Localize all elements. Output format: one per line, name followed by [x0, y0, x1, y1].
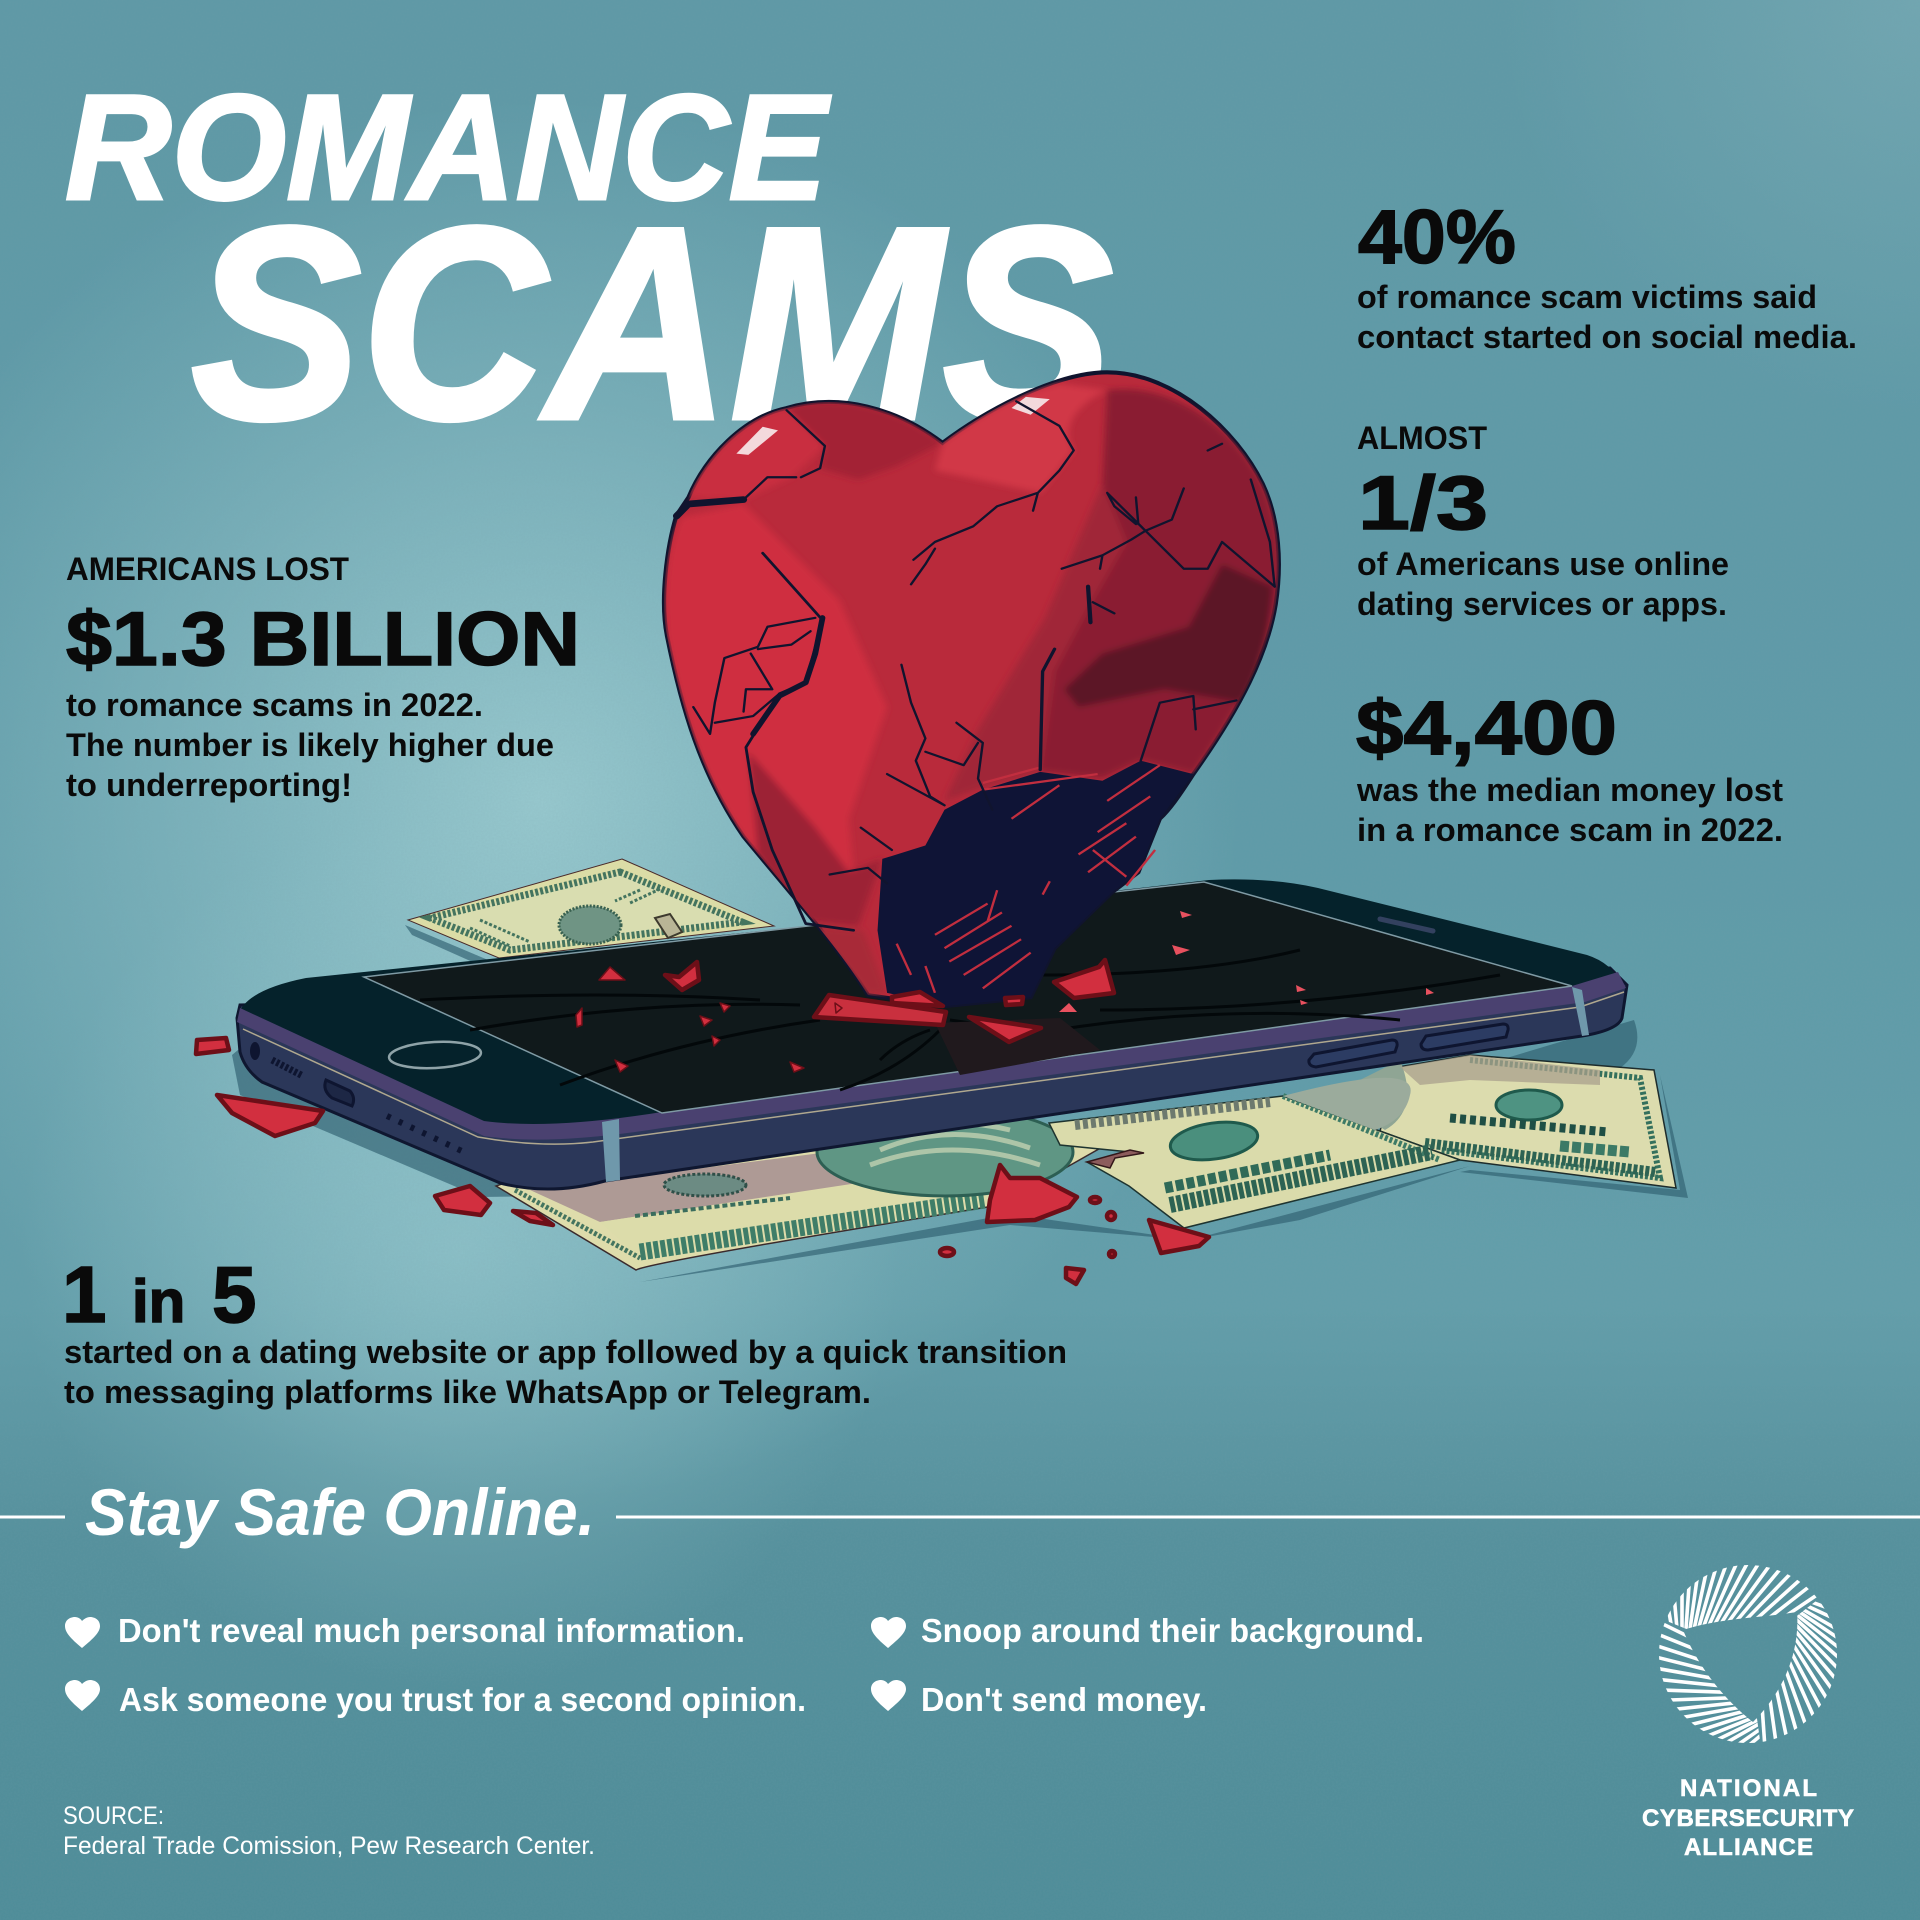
tip: background check: Snoop around their background. [921, 1612, 1424, 1649]
phone rim [237, 972, 1626, 1140]
section heading: Stay Safe Online [0, 1475, 1920, 1549]
stat: 1 in 5 [62, 1250, 1067, 1410]
stat: 1 in 5: started on a dating website or app followed by a quick transition [64, 1334, 1067, 1370]
stat: median loss: $4,400 [1356, 686, 1617, 771]
stat: 1.3 billion lost: AMERICANS LOST [66, 551, 349, 587]
stat: 1.3 billion lost: $1.3 BILLION [66, 597, 580, 682]
illustration: smartphone [237, 879, 1627, 1189]
stat: almost one third: dating services or apps. [1357, 586, 1727, 622]
stat: 1 in 5: in [132, 1268, 185, 1335]
stat: almost one third: 1/3 [1358, 461, 1488, 546]
earpiece [1380, 919, 1433, 931]
screen cracks [420, 950, 1500, 1090]
stat: median loss [1356, 686, 1783, 848]
side buttons [1309, 1024, 1508, 1067]
heart highlights [736, 397, 1050, 455]
illustration: shadows on ground [232, 925, 1688, 1282]
title: SCAMS [191, 171, 1114, 477]
phone body side [237, 968, 1627, 1189]
stat: almost one third [1357, 420, 1729, 622]
stat: 1 in 5: to messaging platforms like WhatsApp or Telegram. [64, 1374, 871, 1410]
title [65, 63, 1114, 477]
illustration: banknote middle [1049, 1078, 1460, 1228]
stat: 1 in 5: 5 [212, 1250, 256, 1339]
stat: median loss: was the median money lost [1356, 772, 1783, 808]
source note: SOURCE: [63, 1802, 164, 1830]
source note [63, 1802, 595, 1860]
antenna bands [602, 987, 1589, 1182]
illustration: broken heart [664, 372, 1279, 1006]
tip: second opinion: Ask someone you trust for a second opinion. [119, 1681, 806, 1718]
logo wordmark: ALLIANCE [1684, 1834, 1813, 1861]
tip: personal information: Don't reveal much personal information. [118, 1612, 745, 1649]
bottom port and speaker holes [250, 1042, 464, 1152]
stat: 1.3 billion lost [66, 551, 580, 803]
stat: 1.3 billion lost: to underreporting! [66, 767, 352, 803]
illustration: banknote behind phone [408, 859, 774, 958]
illustration: banknote bottom [496, 1108, 1150, 1270]
stat: median loss: in a romance scam in 2022. [1357, 812, 1783, 848]
phone top surface bezel [238, 879, 1622, 1127]
heart cracks [677, 401, 1275, 930]
phone screen [364, 882, 1572, 1113]
section heading: Stay Safe Online: Stay Safe Online. [85, 1475, 595, 1549]
stat: 40 percent [1357, 195, 1857, 355]
logo wordmark [1642, 1775, 1854, 1861]
title: ROMANCE [65, 63, 831, 231]
logo wordmark: NATIONAL [1680, 1775, 1817, 1802]
source note: Federal Trade Comission, Pew Research Center. [63, 1832, 595, 1860]
stat: 1.3 billion lost: to romance scams in 2022. [66, 687, 483, 723]
home button [388, 1040, 482, 1070]
stat: almost one third: of Americans use online [1357, 546, 1729, 582]
tip: do not send money: Don't send money. [921, 1681, 1207, 1718]
stat: almost one third: ALMOST [1357, 420, 1487, 456]
stat: 1 in 5: 1 [62, 1250, 106, 1339]
stat: 1.3 billion lost: The number is likely higher due [66, 727, 554, 763]
illustration: banknote right [1330, 1055, 1676, 1188]
heart shading [666, 383, 1279, 995]
illustration: red heart shards [196, 911, 1434, 1284]
heart body [664, 372, 1279, 1006]
logo wordmark: CYBERSECURITY [1642, 1805, 1854, 1832]
stat: 40 percent: of romance scam victims said [1357, 279, 1817, 315]
red hatching in interior [897, 765, 1160, 993]
heart hollow dark interior [878, 761, 1193, 1006]
stat: 40 percent: contact started on social media. [1357, 319, 1857, 355]
stat: 40 percent: 40% [1358, 195, 1516, 280]
logo: National Cybersecurity Alliance mark [1659, 1565, 1837, 1743]
